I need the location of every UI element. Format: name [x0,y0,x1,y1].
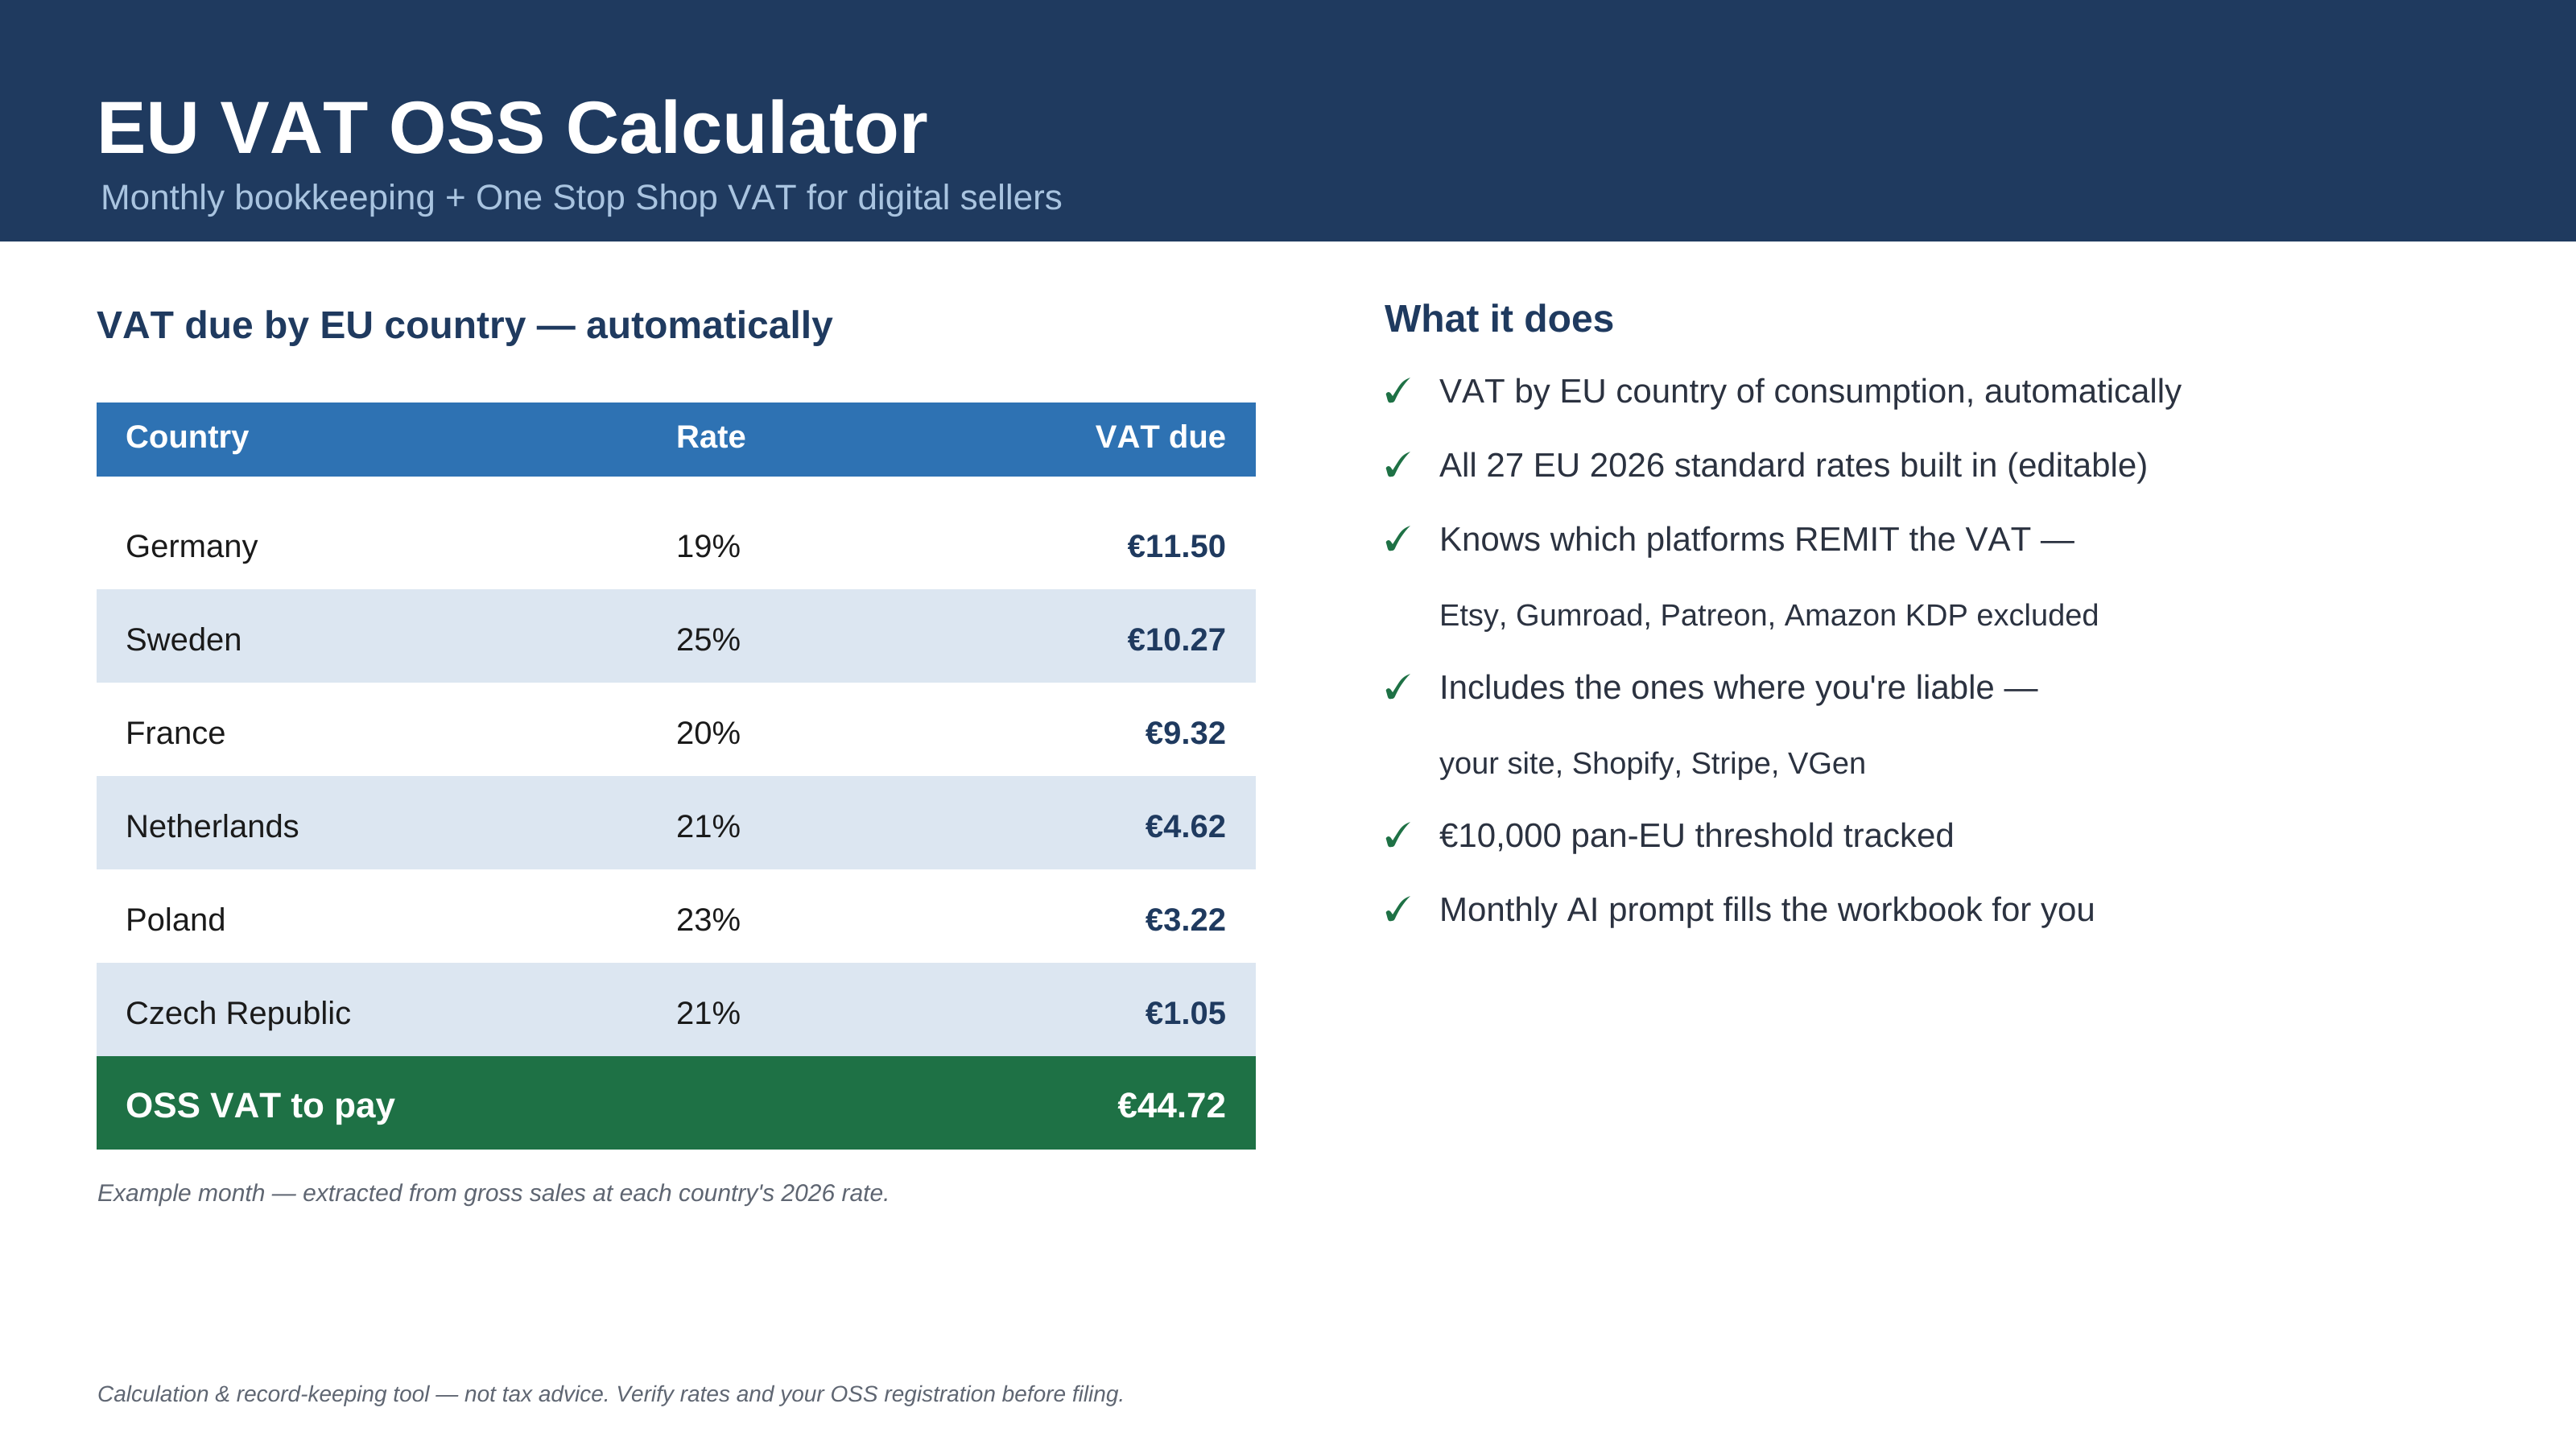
feature list [1386,372,2182,928]
header banner [0,0,2576,242]
table header row: Rate [676,419,746,455]
item: platforms remit: Knows which platforms REMIT the VAT — [1439,520,2074,558]
row: Sweden: Sweden [126,622,242,658]
total row [97,1056,1256,1150]
item: VAT by country: VAT by EU country of consumption, automatically [1439,372,2182,410]
left heading: VAT due by EU country — automatically [97,304,833,347]
row: Germany: Germany [126,529,258,564]
item: liable: Includes the ones where you're liable — [1439,668,2037,706]
table header row: VAT due [1096,419,1226,455]
item: threshold: €10,000 pan-EU threshold tracked [1439,816,1955,854]
row: Germany: 19% [676,529,741,564]
row: Germany: €11.50 [1128,529,1226,564]
row: Czech Republic: 21% [676,996,741,1031]
table header row: Country [126,419,250,455]
row: Poland: €3.22 [1146,902,1226,938]
row: Sweden: 25% [676,622,741,658]
right heading: What it does [1385,298,1614,341]
row: Poland: Poland [126,902,226,938]
row: Czech Republic: Czech Republic [126,996,351,1031]
sub-item: liable platforms: your site, Shopify, Stripe, VGen [1439,747,1866,781]
row: Czech Republic: €1.05 [1146,996,1226,1031]
row: Netherlands: 21% [676,809,741,844]
title: EU VAT OSS Calculator [97,87,928,169]
item: AI prompt: Monthly AI prompt fills the workbook for you [1439,890,2095,928]
row: Germany [126,529,1226,564]
row: France: €9.32 [1146,716,1226,751]
row: Netherlands: €4.62 [1146,809,1226,844]
row: Netherlands: Netherlands [126,809,299,844]
row: France: 20% [676,716,741,751]
table header row [97,402,1256,477]
disclaimer: Calculation & record-keeping tool — not tax advice. Verify rates and your OSS registration before filing. [97,1381,1125,1406]
item: rates: All 27 EU 2026 standard rates built in (editable) [1439,446,2148,484]
row: Poland [126,902,1226,938]
row: Poland: 23% [676,902,741,938]
total row: OSS VAT to pay [126,1086,395,1125]
table footnote: Example month — extracted from gross sales at each country's 2026 rate. [97,1180,890,1207]
row: Czech Republic [97,963,1256,1056]
table: VAT by country [97,402,1256,1150]
row: France [126,716,1226,751]
total row: €44.72 [1117,1086,1226,1125]
row: Sweden [97,589,1256,683]
subtitle: Monthly bookkeeping + One Stop Shop VAT for digital sellers [101,178,1063,217]
row: Netherlands [97,776,1256,869]
row: Sweden: €10.27 [1128,622,1226,658]
row: France: France [126,716,225,751]
sub-item: excluded platforms: Etsy, Gumroad, Patreon, Amazon KDP excluded [1439,599,2099,633]
